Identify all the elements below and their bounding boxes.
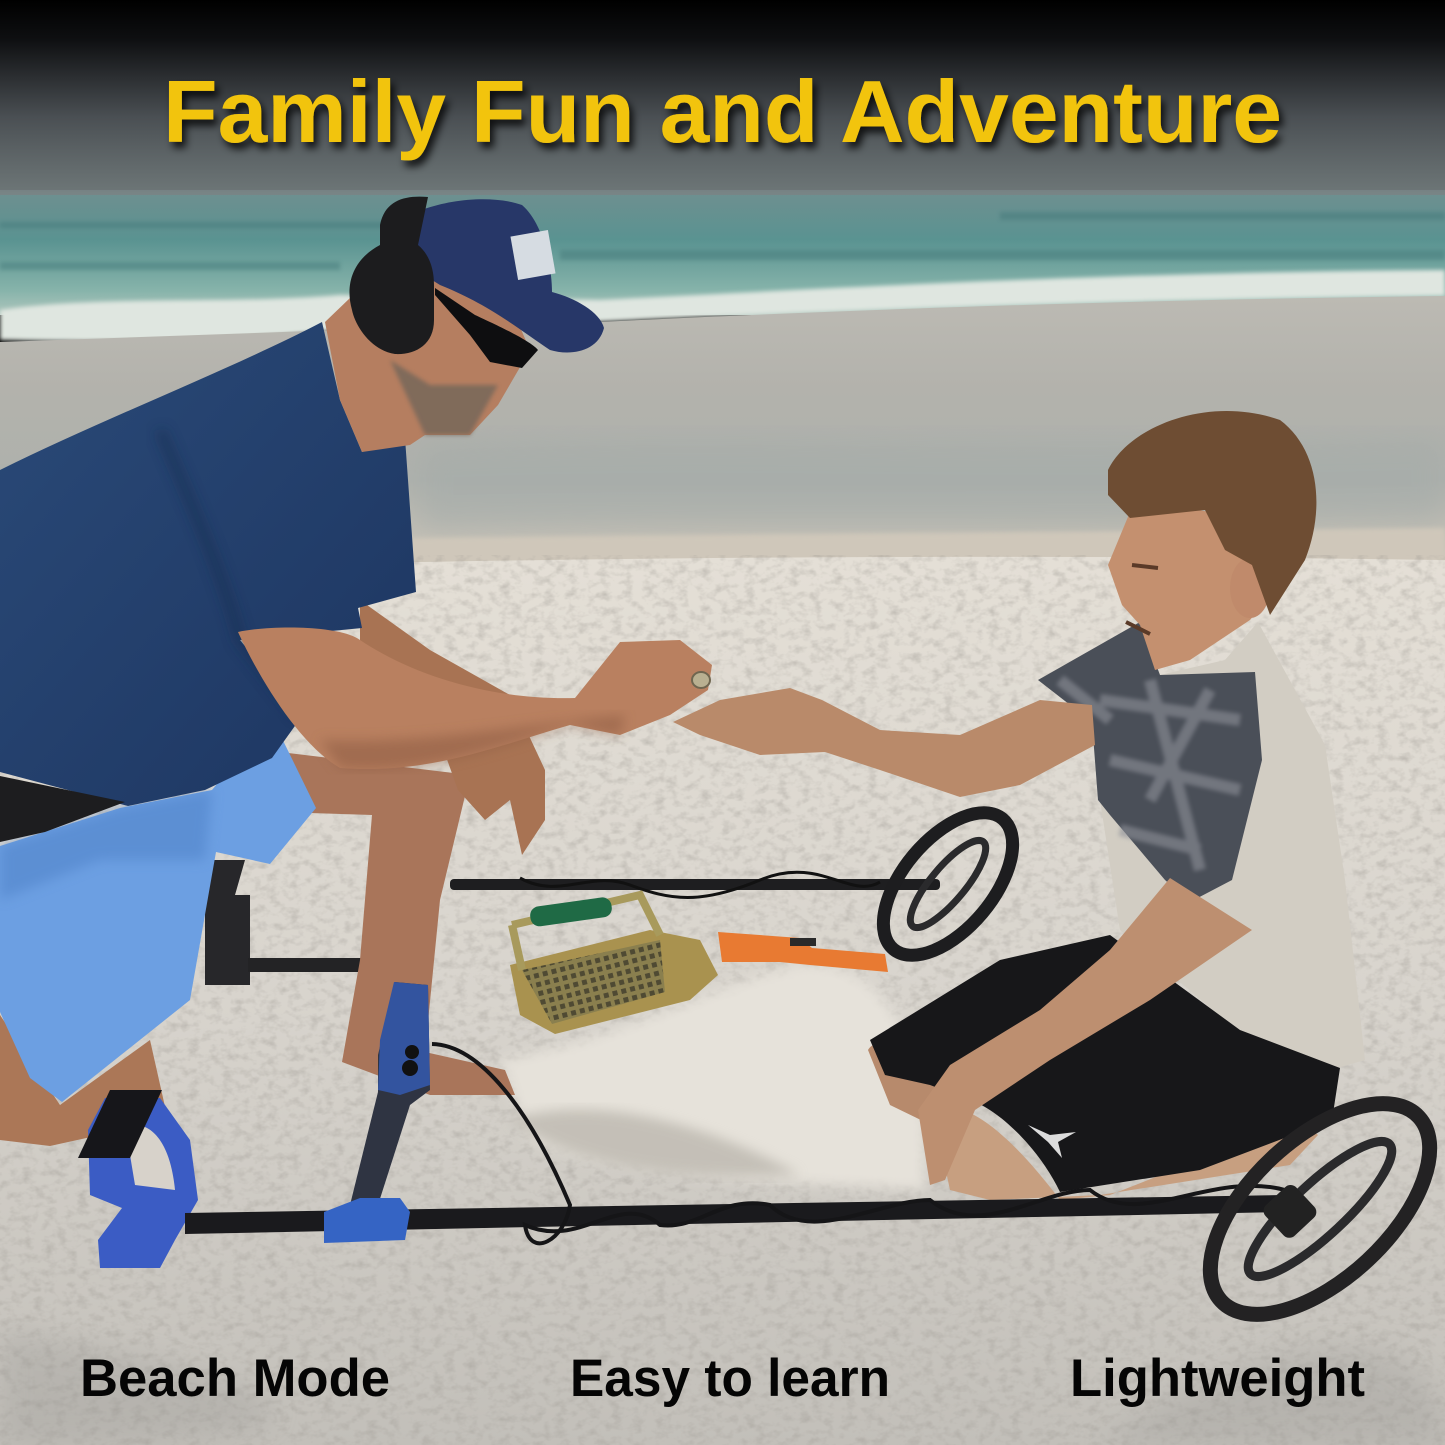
father: ear defenders — [349, 197, 434, 354]
boy: extended arm and hand — [673, 688, 1095, 797]
detector: cable — [432, 1044, 1285, 1243]
father: front leg and foot — [280, 752, 515, 1095]
father: extended arm and hand — [238, 627, 712, 769]
feature label: Lightweight: Lightweight — [1070, 1349, 1365, 1408]
title: Family Fun and Adventure — [163, 62, 1282, 161]
sand mound and hole — [500, 965, 925, 1190]
father: sunglasses — [435, 288, 538, 368]
father: kneeling leg — [0, 1015, 168, 1146]
father: shirt sleeve fold — [160, 430, 300, 716]
boy: t-shirt — [1038, 622, 1365, 1070]
boy: neck and face — [1108, 500, 1275, 670]
feature label: Beach Mode: Beach Mode — [80, 1349, 390, 1408]
sand scoop — [510, 895, 718, 1034]
father: shorts — [0, 718, 316, 1102]
top dark gradient band — [0, 0, 1445, 195]
boy: front leg — [868, 1044, 950, 1122]
detector: control handle — [350, 982, 430, 1205]
boy: back leg and foot — [935, 1109, 1318, 1200]
boy: lower arm — [918, 878, 1252, 1185]
father: cap badge — [510, 230, 556, 280]
boy: shorts — [870, 935, 1340, 1192]
father: back arm — [360, 600, 545, 855]
father: shorts shadow — [0, 790, 212, 900]
father: beard — [390, 360, 498, 435]
boy: ear — [1230, 558, 1270, 618]
father figure — [0, 197, 712, 1146]
father: cap — [380, 199, 604, 352]
father: neck and face — [325, 250, 530, 452]
father: coin — [692, 672, 710, 688]
boy: shorts logo — [1028, 1125, 1076, 1158]
boy: hair — [1108, 411, 1316, 615]
front metal detector — [78, 982, 1445, 1352]
detector: search coil — [1174, 1066, 1445, 1352]
detector: shaft — [185, 1195, 1285, 1234]
boy: eye and mouth — [1126, 565, 1158, 634]
orange pinpointer — [718, 932, 888, 972]
rear metal detector — [205, 790, 1037, 985]
boy: shirt dark pattern — [1038, 622, 1262, 902]
father: arm shading — [320, 715, 625, 769]
detector: armrest cuff — [88, 1098, 198, 1268]
father: belt — [0, 776, 125, 842]
father: shirt — [0, 322, 416, 806]
boy figure — [673, 411, 1365, 1200]
feature label: Easy to learn: Easy to learn — [570, 1349, 890, 1408]
